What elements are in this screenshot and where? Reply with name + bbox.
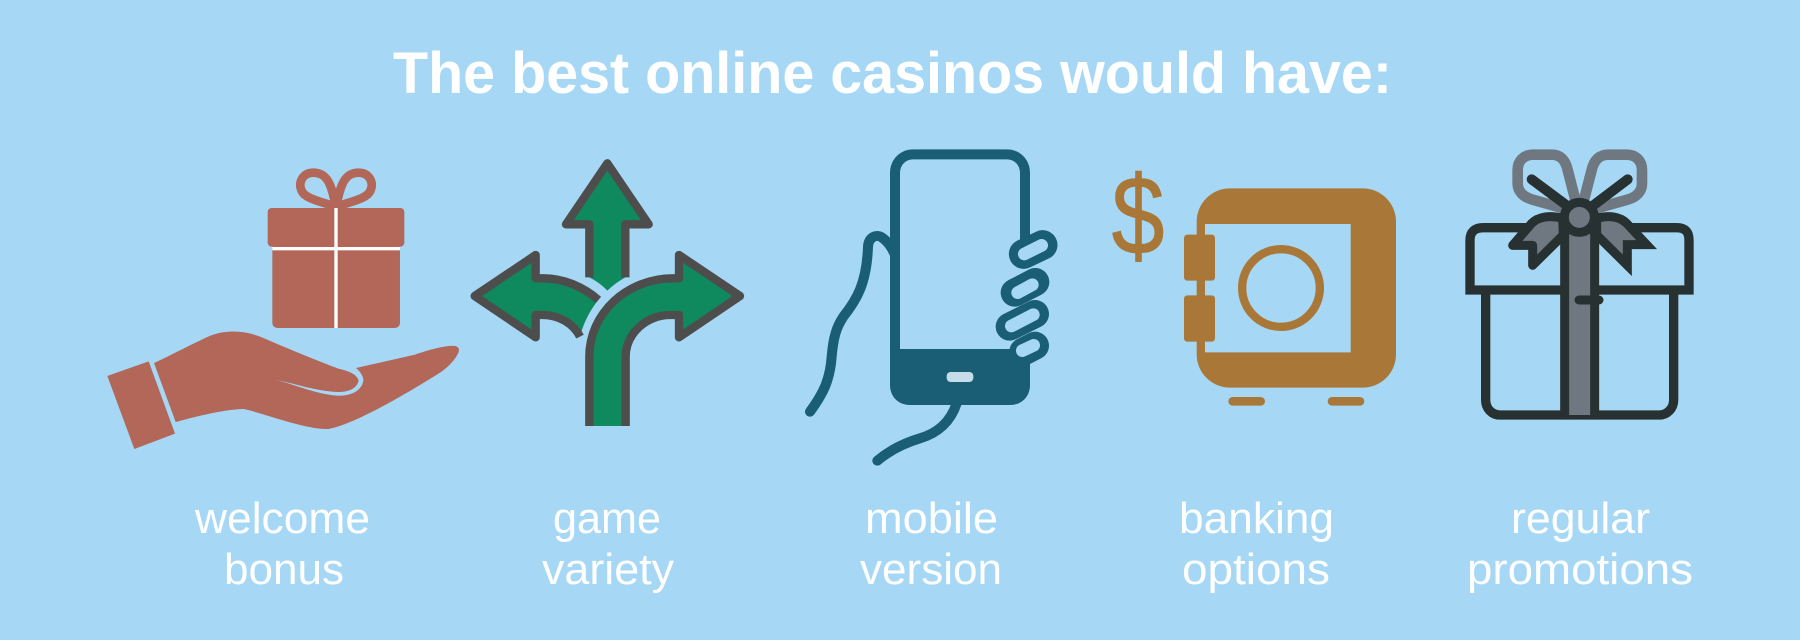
- feet: [1228, 397, 1364, 406]
- ribbon tail left: [1513, 217, 1563, 265]
- panel: welcome bonus: [107, 173, 459, 594]
- dial: [1242, 249, 1320, 327]
- bow loops: [1518, 155, 1642, 208]
- right arrow: [589, 255, 740, 426]
- thumb and wrist: [810, 236, 895, 412]
- home button: [947, 372, 973, 382]
- title: The best online casinos would have:: [393, 41, 1392, 106]
- label: welcome bonus: bonus: [224, 545, 344, 594]
- ribbon tail right: [1597, 217, 1647, 265]
- box body: [1486, 294, 1674, 415]
- open hand: [154, 331, 459, 429]
- label: mobile version: mobile: [865, 494, 998, 543]
- lower wrist: [877, 403, 957, 461]
- label: banking options: options: [1182, 545, 1330, 594]
- icon: three-way arrows: [475, 163, 740, 426]
- label: game variety: [542, 494, 674, 594]
- panel: regular promotions: [1467, 155, 1693, 594]
- label: mobile version: version: [860, 545, 1002, 594]
- panel: mobile version: [810, 154, 1043, 594]
- label: game variety: game: [553, 494, 661, 543]
- label: banking options: [1179, 494, 1334, 594]
- safe body: [1197, 188, 1396, 388]
- up arrow: [566, 163, 649, 291]
- label: regular promotions: regular: [1511, 494, 1650, 543]
- icon: gift box with ribbon: [1470, 155, 1689, 419]
- bow strings: [1532, 179, 1628, 207]
- phone outline: [895, 154, 1025, 353]
- shirt cuff: [107, 361, 175, 449]
- dollar sign: $: [1112, 153, 1164, 278]
- icon: hand holding gift: [107, 173, 459, 449]
- label: banking options: banking: [1179, 494, 1334, 543]
- panel: banking options: [1112, 153, 1396, 594]
- label: welcome bonus: [194, 494, 370, 594]
- gift bow: [300, 173, 372, 207]
- label: game variety: variety: [542, 545, 674, 594]
- vertical ribbon: [1565, 230, 1599, 419]
- hinges: [1184, 235, 1215, 342]
- label: regular promotions: promotions: [1467, 545, 1693, 594]
- gift box: [268, 208, 404, 328]
- left arrow: [475, 255, 598, 337]
- fingers: [1010, 245, 1043, 352]
- box lid: [1470, 228, 1689, 290]
- icon: safe with dollar sign: [1112, 153, 1396, 406]
- panel: game variety: [475, 163, 740, 594]
- icon: hand holding phone: [810, 154, 1043, 461]
- ribbon knot: [1564, 202, 1594, 232]
- label: welcome bonus: welcome: [194, 494, 370, 543]
- label: mobile version: [860, 494, 1002, 594]
- label: regular promotions: [1467, 494, 1693, 594]
- phone base panel: [890, 349, 1030, 405]
